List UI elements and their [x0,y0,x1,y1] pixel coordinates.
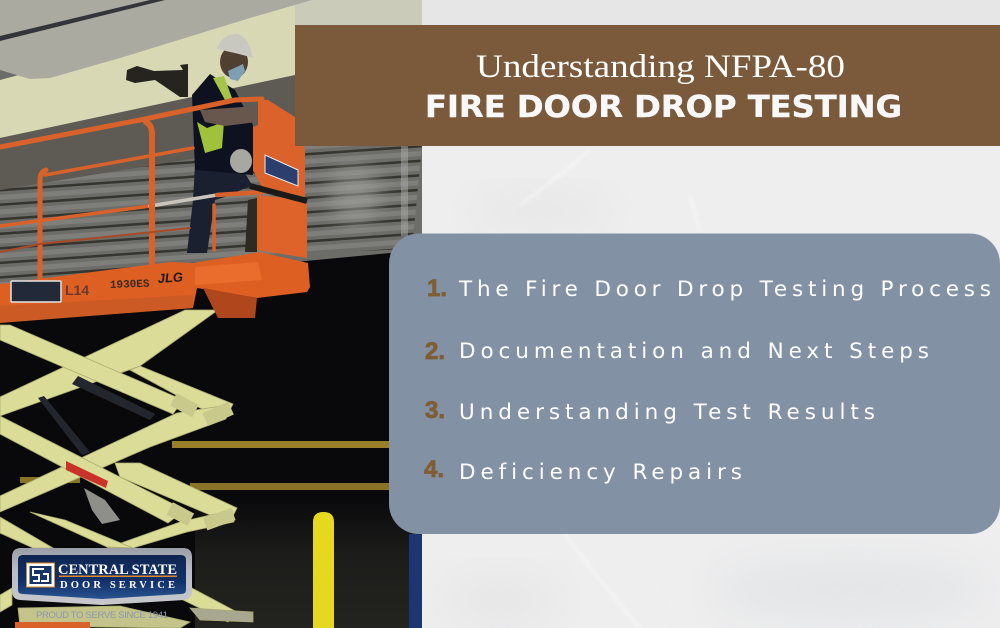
logo mark [26,563,54,587]
orange basket gate [253,100,305,197]
item 3: Understanding Test Results [459,400,875,425]
wall bracket [126,64,188,97]
forearm [200,106,257,126]
item 2: 2. [425,338,445,365]
floor stripes [20,441,390,490]
lift platform [0,252,310,323]
company logo: DOOR SERVICE [60,580,175,591]
door service sticker [265,155,298,186]
item 1: The Fire Door Drop Testing Process [458,277,991,302]
roller door [0,142,422,285]
model labels: L14 [65,282,89,298]
company logo [12,548,192,605]
legs [187,165,252,253]
logo wordmark: CENTRAL STATE [58,562,177,578]
logo tagline: PROUD TO SERVE SINCE 1941 [36,610,168,621]
item 4: Deficiency Repairs [459,460,742,485]
title line 1: Understanding NFPA-80 [476,49,845,85]
glove [230,149,252,173]
item 4: 4. [424,456,444,483]
hard hat [217,34,254,58]
lift platform: 1930ES [110,279,150,292]
header banner [295,25,1000,146]
torso [192,74,253,175]
hydraulic cylinder [38,396,90,455]
platform sticker [11,281,61,302]
head [220,50,248,77]
photo: technician on orange scissor lift testing a fire door [0,0,422,628]
title line 2: FIRE DOOR DROP TESTING [425,90,902,125]
far leg [245,198,257,252]
red reflector [66,461,108,488]
scissor lift arms [0,310,253,628]
marble background [422,0,1000,628]
yellow bollard [313,512,334,628]
panel: table of contents [389,234,1000,534]
wall and ceiling [0,0,422,628]
item 3: 3. [425,397,445,424]
bracket [84,488,120,524]
face mask [228,64,245,81]
lift joints [166,393,236,530]
item 2: Documentation and Next Steps [459,339,929,364]
item 1: 1. [427,275,447,302]
lift platform: JLG [157,269,183,286]
concrete base [195,520,414,628]
orange railing [0,99,263,280]
worker [187,34,257,253]
safety vest [197,122,224,153]
bottom orange base [15,622,90,628]
